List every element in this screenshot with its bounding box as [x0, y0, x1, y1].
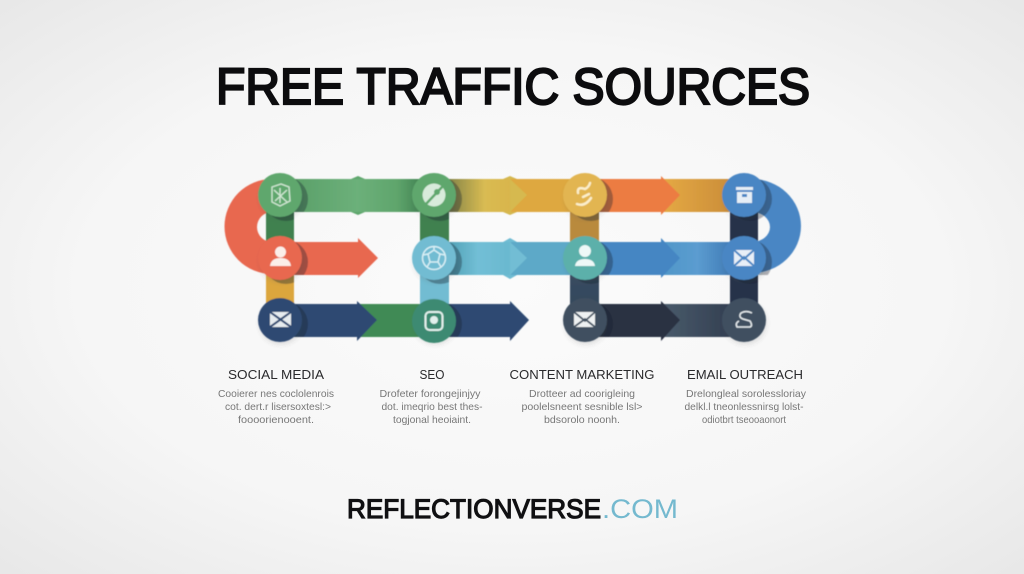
heading: content marketing: CONTENT MARKETING	[510, 367, 654, 382]
text: social media description: cot. dert.r lisersoxtesl:>	[225, 401, 331, 413]
icon: person badge teal	[563, 236, 607, 280]
text: seo description: togjonal heoiaint.	[393, 414, 471, 426]
flow diagram	[225, 173, 801, 346]
icon: envelope badge slate	[563, 298, 607, 342]
footer website: .COM	[602, 494, 678, 524]
row 3 slate band	[660, 304, 735, 337]
heading: seo: SEO	[420, 367, 444, 382]
vertical connector: column 3	[570, 212, 599, 306]
icon: envelope badge navy	[258, 298, 302, 342]
text: email outreach description: odiotbrt tseooaonort	[702, 414, 786, 426]
text: content marketing description: bdsorolo noonh.	[544, 414, 620, 426]
icon: seo globe badge	[412, 236, 456, 280]
title: FREE TRAFFIC SOURCES	[216, 58, 810, 115]
left red curve	[225, 179, 272, 274]
column: seo	[380, 367, 483, 426]
row 3 navy arrow 2	[445, 301, 529, 341]
text: content marketing description: poolelsneent sesnible lsl>	[522, 401, 642, 413]
icon: document badge blue	[722, 173, 766, 217]
text: email outreach description: Drelongleal sorolessloriay	[686, 388, 807, 400]
text: seo description	[380, 388, 483, 426]
vertical connector: column 2	[420, 212, 449, 306]
circle shadows on bands	[264, 177, 772, 346]
icon: seo robot badge	[412, 299, 456, 343]
row 1 yellow arrow	[445, 176, 577, 215]
icon: script badge slate	[722, 298, 766, 342]
row 3 navy arrow	[290, 301, 377, 341]
text: social media description: foooorienooent.	[238, 414, 314, 426]
column: content marketing	[510, 367, 654, 426]
text: email outreach description	[684, 388, 807, 426]
row 1 amber band	[660, 179, 735, 212]
text: social media description: Cooierer nes coclolenrois	[218, 388, 334, 400]
right blue curve	[752, 179, 801, 273]
row 3 green band	[350, 304, 425, 337]
row 2 red arrow	[290, 238, 378, 278]
row 1 orange arrow	[595, 176, 680, 215]
text: seo description: Drofeter forongejinjyy	[380, 388, 481, 400]
column: email outreach	[684, 367, 807, 426]
icon: envelope badge blue	[722, 236, 766, 280]
heading: social media: SOCIAL MEDIA	[228, 367, 324, 382]
icon: seo disc badge	[412, 173, 456, 217]
column: social media	[218, 367, 334, 426]
icon: person badge red	[258, 236, 302, 280]
icon: social network badge	[258, 173, 302, 217]
text: email outreach description: delkl.l tneonlessnirsg lolst-	[684, 401, 804, 413]
icon: content hand badge	[563, 173, 607, 217]
vertical connector: column 4	[730, 212, 758, 306]
row 3 dark arrow	[595, 301, 680, 341]
text: content marketing description	[522, 388, 642, 426]
text: seo description: dot. imeqrio best thes-	[382, 401, 483, 413]
footer website: REFLECTIONVERSE	[347, 494, 601, 524]
heading: email outreach: EMAIL OUTREACH	[687, 367, 803, 382]
row 2 teal arrow	[445, 238, 577, 279]
text: social media description	[218, 388, 334, 426]
vertical connector: column 1	[266, 212, 294, 306]
circle soft halos	[259, 176, 767, 345]
row 2 blue band	[660, 242, 735, 275]
row 1 green arrow	[290, 176, 424, 215]
row 2 blue arrow	[595, 238, 680, 278]
text: content marketing description: Drotteer ad coorigleing	[529, 388, 635, 400]
